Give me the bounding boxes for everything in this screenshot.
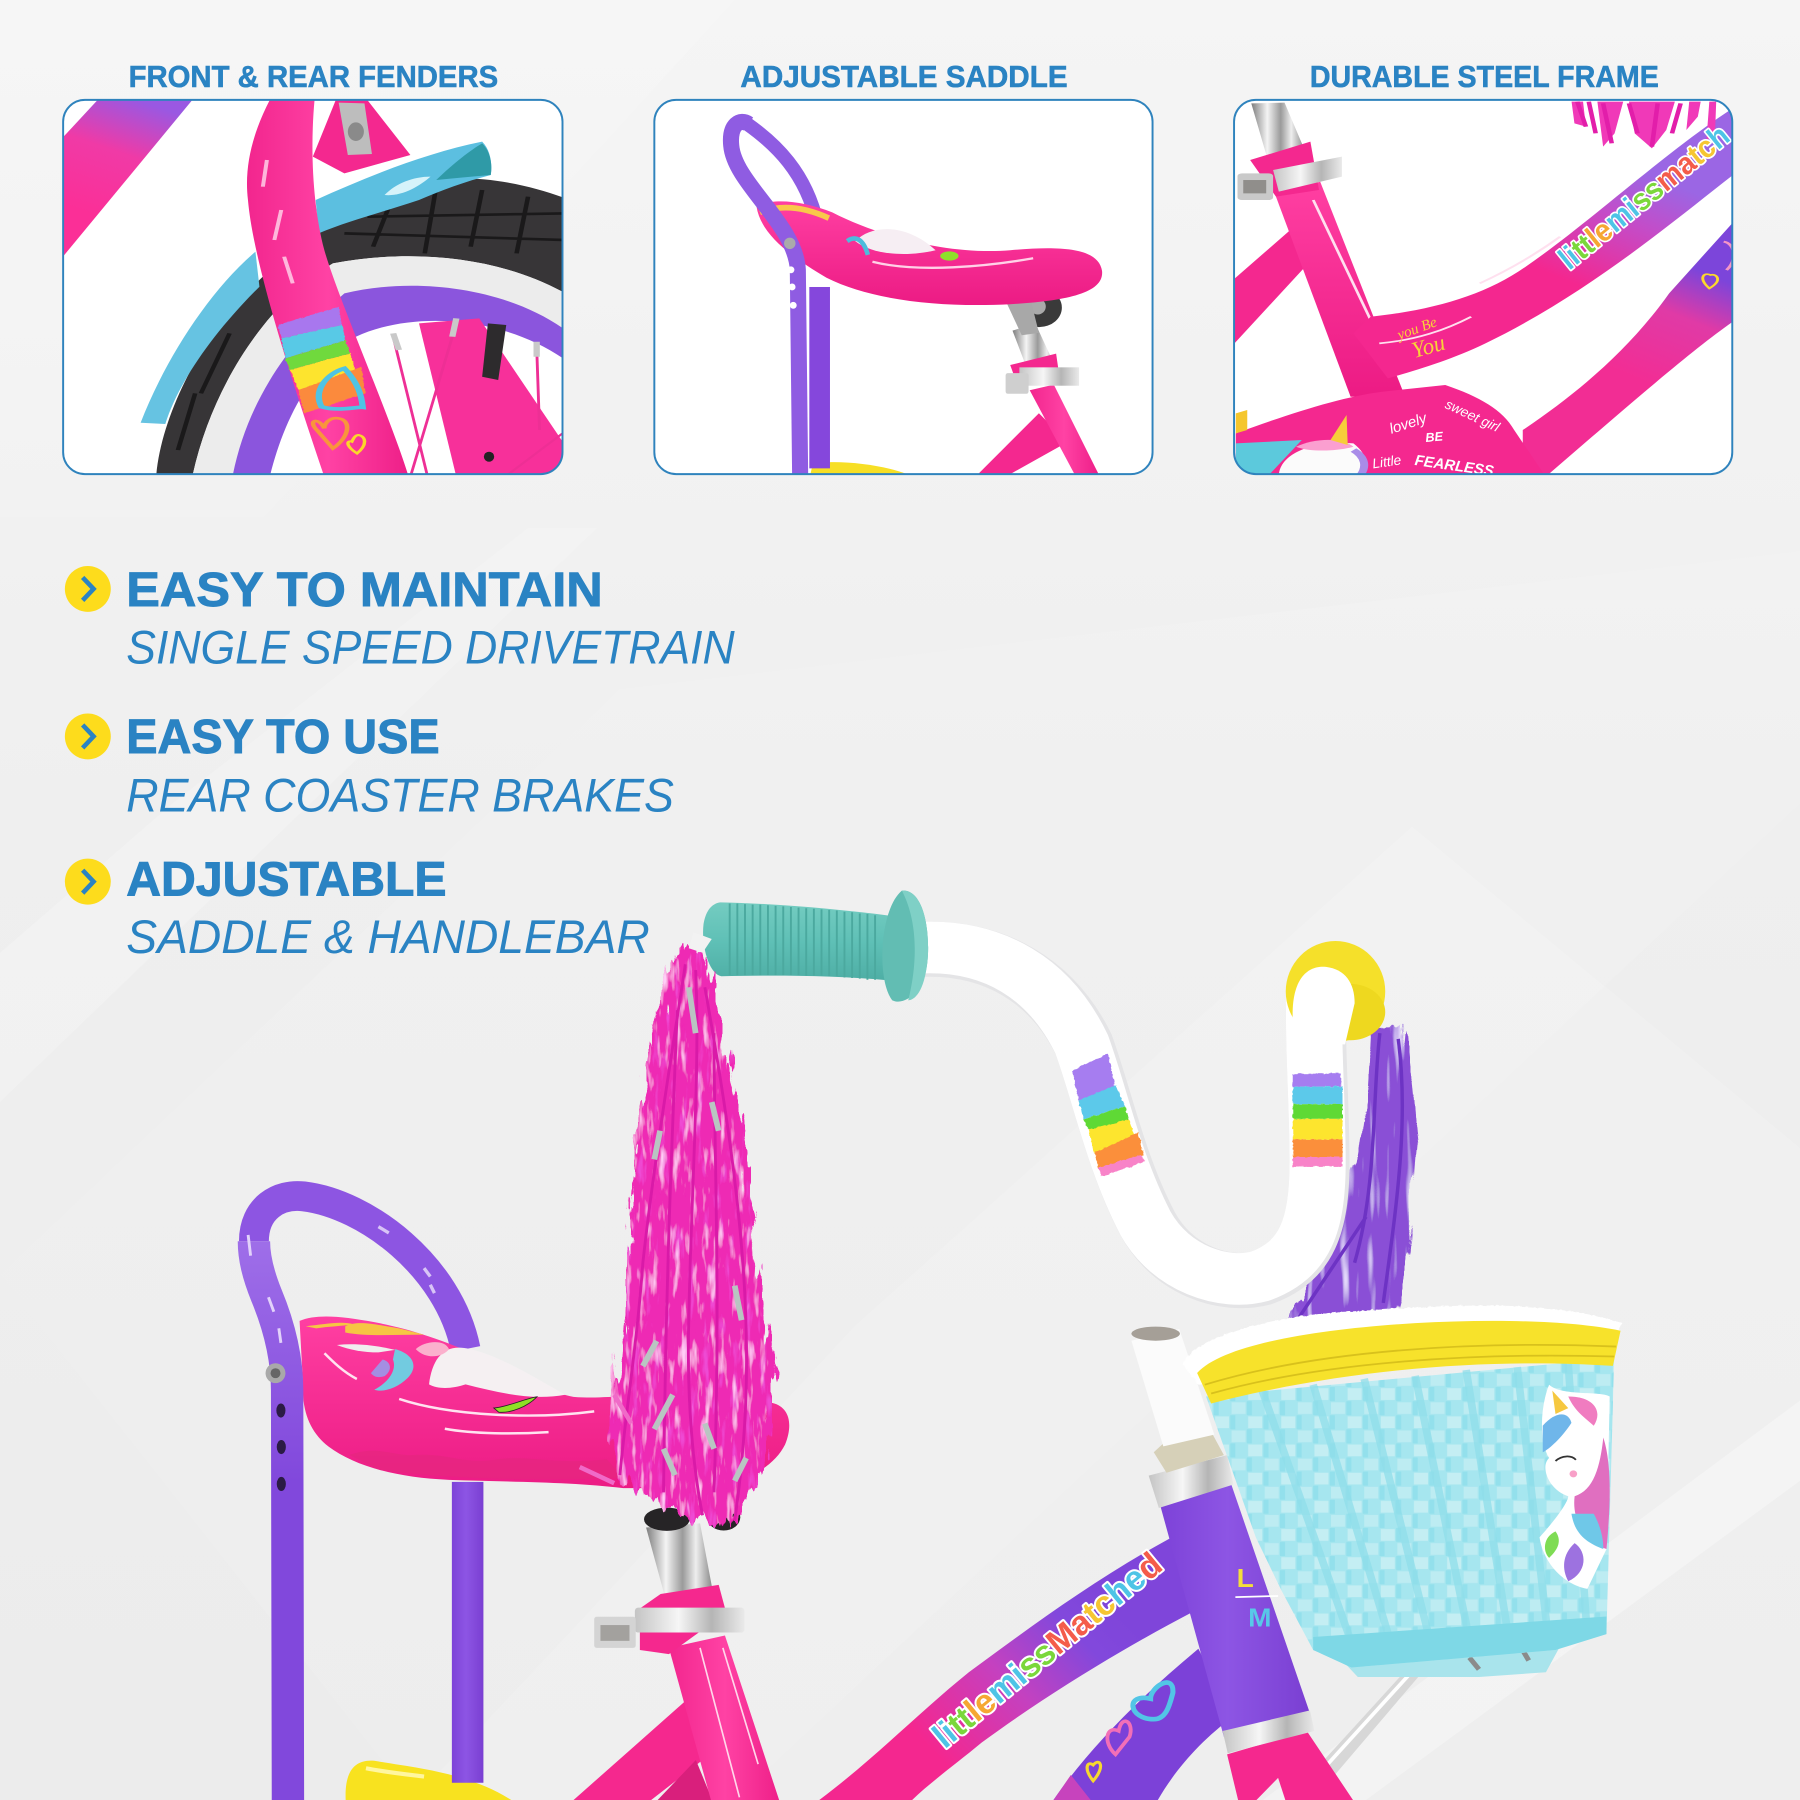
rear bar vertical [809, 287, 830, 468]
brand lettering on top tube: littlemissmatch [1552, 118, 1736, 276]
purple streamer [1286, 1027, 1418, 1327]
black peg [482, 323, 506, 380]
fork [247, 100, 409, 477]
seat tube [1276, 182, 1405, 397]
panel: front and rear fenders photo [57, 100, 568, 477]
heart yellow [1087, 1762, 1101, 1781]
logo L: L [1237, 1564, 1254, 1593]
yellow fender [810, 462, 907, 474]
panel: durable steel frame photo: You [1409, 330, 1448, 363]
logo divider [1235, 1596, 1278, 1597]
feature 2 description: REAR COASTER BRAKES [126, 769, 674, 822]
fender lower [141, 252, 259, 424]
chainguard [1236, 385, 1523, 474]
panel: durable steel frame photo [1233, 100, 1736, 480]
head tube [1160, 1482, 1310, 1737]
woven body [1206, 1358, 1614, 1668]
basket bracket [1313, 1663, 1425, 1800]
feature 3 heading: ADJUSTABLE [126, 852, 447, 906]
logo M: M [1248, 1603, 1271, 1632]
saddle [300, 1316, 789, 1488]
main frame, fork and stem [809, 1327, 1425, 1800]
feature list [65, 563, 735, 963]
fur trim [1182, 1306, 1622, 1385]
headset rings [1223, 1710, 1314, 1753]
unicorn sticker [1540, 1385, 1610, 1589]
saddle [757, 201, 1102, 305]
yellow rim [1197, 1321, 1621, 1403]
down tube [1523, 220, 1735, 477]
you be you script: you Be [1393, 314, 1440, 344]
unicorn on chainguard [1236, 440, 1302, 477]
purple rim [232, 286, 565, 477]
chainguard lettering: FEARLESS [1414, 452, 1495, 480]
yellow bar end [1286, 941, 1385, 1042]
handlebar [703, 891, 1622, 1677]
backrest arc [254, 1196, 466, 1349]
feature 2 heading: EASY TO USE [126, 710, 440, 764]
panel title: adjustable saddle: ADJUSTABLE SADDLE [740, 59, 1068, 94]
icon: bullet chevron 3 [65, 859, 111, 905]
seat stays [1235, 231, 1303, 343]
seatpost chrome [646, 1523, 712, 1596]
seat clamp collar [640, 1585, 726, 1654]
hand grip [703, 891, 928, 1002]
clamp [1273, 157, 1342, 192]
rear saddle and backrest [248, 1196, 789, 1800]
clamp [1010, 354, 1058, 374]
panel title: front and rear fenders: FRONT & REAR FENDERS [129, 59, 498, 94]
tassel top [1572, 102, 1716, 148]
basket [1182, 1306, 1622, 1677]
icon: bullet chevron 1 [65, 566, 111, 612]
chainguard lettering: lovely [1387, 409, 1430, 438]
hearts on fork [319, 368, 363, 409]
feature 3 description: SADDLE & HANDLEBAR [126, 910, 650, 963]
frame tube top left [57, 100, 192, 263]
seat clamp [635, 1608, 744, 1633]
collar [1250, 142, 1319, 197]
backrest left upright [254, 1241, 288, 1800]
unicorn on saddle [337, 1342, 565, 1412]
chainguard lettering: sweet girl [1443, 397, 1503, 435]
basket bottom [1345, 1643, 1562, 1677]
rainbow right [1293, 1074, 1343, 1166]
panel title: durable steel frame: DURABLE STEEL FRAME [1310, 59, 1659, 94]
down tube [1049, 1649, 1233, 1800]
tire [156, 178, 565, 477]
seat stay [567, 1694, 719, 1800]
feature 1 heading: EASY TO MAINTAIN [126, 563, 603, 617]
heart on frame [1703, 274, 1718, 288]
back arc [747, 124, 817, 224]
seat tube [669, 1635, 781, 1800]
heart pink [1107, 1721, 1131, 1754]
fork crown [1227, 1731, 1358, 1800]
top tube [809, 1538, 1195, 1800]
pink streamer [580, 932, 774, 1527]
white sidewall [192, 256, 565, 477]
panel: adjustable saddle photo [654, 100, 1153, 474]
brand lettering: littlemissMatched [926, 1545, 1170, 1756]
icon: bullet chevron 2 [65, 713, 111, 759]
screw and holes [266, 1363, 285, 1383]
front bar [731, 122, 800, 474]
heart cyan [1133, 1683, 1173, 1719]
rainbow on fork [278, 307, 365, 413]
chainguard lettering [1373, 402, 1502, 474]
rear fork leg [419, 318, 568, 477]
stem [1131, 1329, 1214, 1446]
seatpost [1012, 328, 1050, 362]
spokes [392, 337, 562, 474]
bracket [339, 103, 372, 155]
rear frame tube [313, 100, 410, 173]
bike photo [248, 891, 1622, 1800]
fender upper [316, 142, 491, 233]
chainguard lettering: Little [1371, 452, 1403, 471]
top tube [1353, 107, 1735, 378]
rainbow left [1072, 1053, 1145, 1176]
feature 1 description: SINGLE SPEED DRIVETRAIN [126, 621, 735, 674]
yellow rear fender [346, 1761, 520, 1800]
chainguard lettering: BE [1425, 429, 1444, 445]
seatpost [1251, 103, 1305, 158]
seat tube and stay [978, 413, 1068, 474]
handlebar plug [689, 932, 712, 953]
backrest right upright [452, 1482, 483, 1783]
